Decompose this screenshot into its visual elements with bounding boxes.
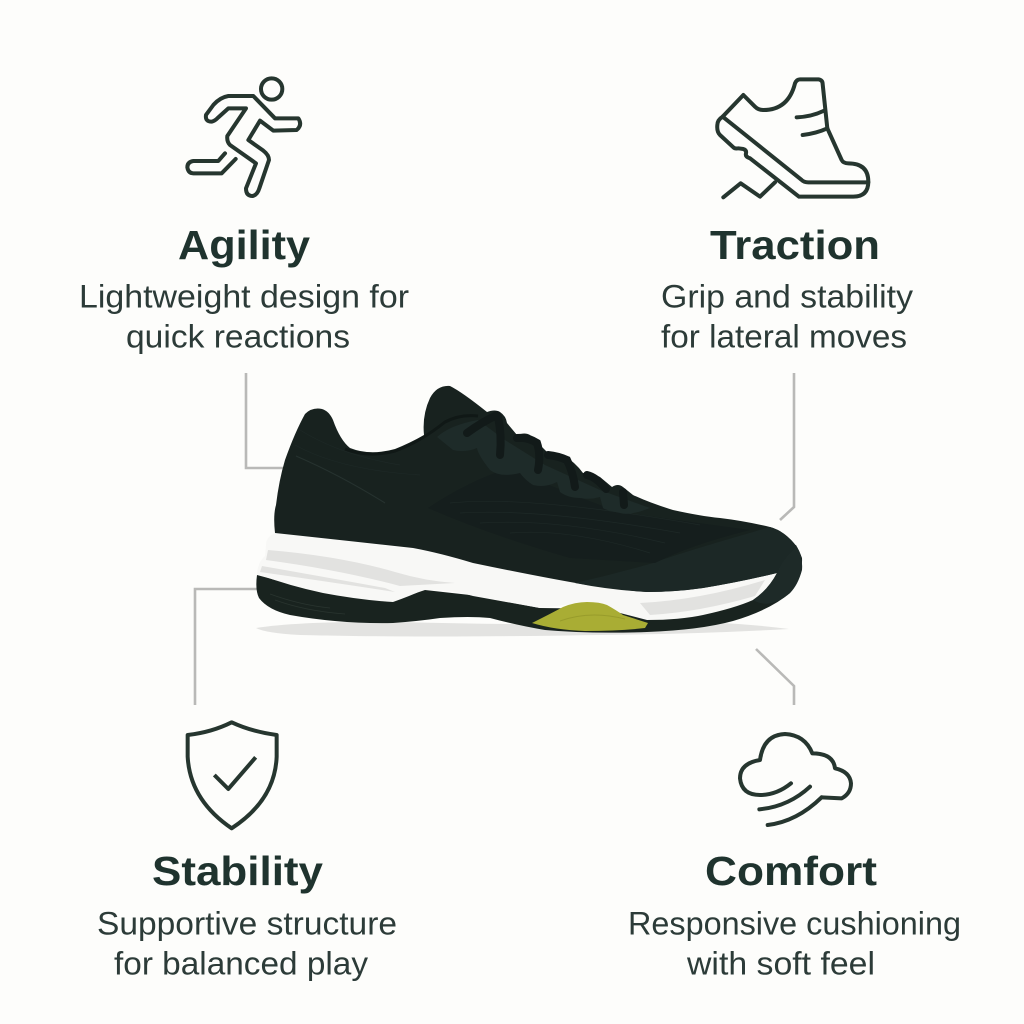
panel: comfort: [628, 734, 961, 982]
text: traction description: [661, 278, 913, 354]
text: stability description: Supportive structure: [97, 906, 397, 942]
text: comfort description: Responsive cushioning: [628, 906, 961, 942]
cushioning pod: [532, 602, 648, 631]
icon: tilted shoe on ground: [717, 79, 868, 197]
heading: Agility: Agility: [178, 222, 310, 268]
text: agility description: quick reactions: [126, 318, 350, 354]
mesh panel: [428, 468, 750, 563]
toe bumper: [753, 547, 802, 604]
text: agility description: Lightweight design for: [79, 278, 409, 314]
laces: [467, 415, 624, 505]
connector: agility: [246, 373, 285, 468]
midsole shading: [260, 550, 765, 615]
connector: comfort: [756, 649, 794, 705]
heel-side sole texture: [270, 594, 345, 614]
mesh texture: [295, 430, 700, 553]
text: comfort description: with soft feel: [686, 946, 875, 982]
upper: [274, 386, 802, 592]
toe cap: [575, 527, 797, 592]
icon: running person: [187, 78, 300, 196]
heading: Comfort: Comfort: [705, 848, 877, 894]
panel: agility: [79, 78, 409, 355]
text: comfort description: [628, 906, 961, 982]
connector: traction: [780, 373, 794, 520]
text: stability description: [97, 906, 397, 982]
outsole: [256, 545, 802, 633]
shoe illustration: [256, 386, 802, 636]
collar lining: [345, 416, 478, 454]
eyestay: [437, 420, 650, 514]
text: traction description: Grip and stability: [661, 278, 913, 314]
icon: cloud with wind: [740, 734, 851, 825]
heading: Traction: Traction: [710, 222, 880, 268]
icon: shield with check: [188, 722, 277, 828]
panel: traction: [661, 79, 913, 355]
pod highlight: [560, 615, 625, 621]
midsole: [257, 533, 777, 620]
text: stability description: for balanced play: [114, 946, 368, 982]
panel: stability: [97, 722, 397, 982]
heading: Stability: Stability: [152, 848, 323, 894]
ground shadow: [256, 622, 789, 636]
text: agility description: [79, 278, 409, 354]
connector: stability: [195, 589, 257, 705]
seam line: [296, 456, 385, 503]
text: traction description: for lateral moves: [661, 318, 907, 354]
